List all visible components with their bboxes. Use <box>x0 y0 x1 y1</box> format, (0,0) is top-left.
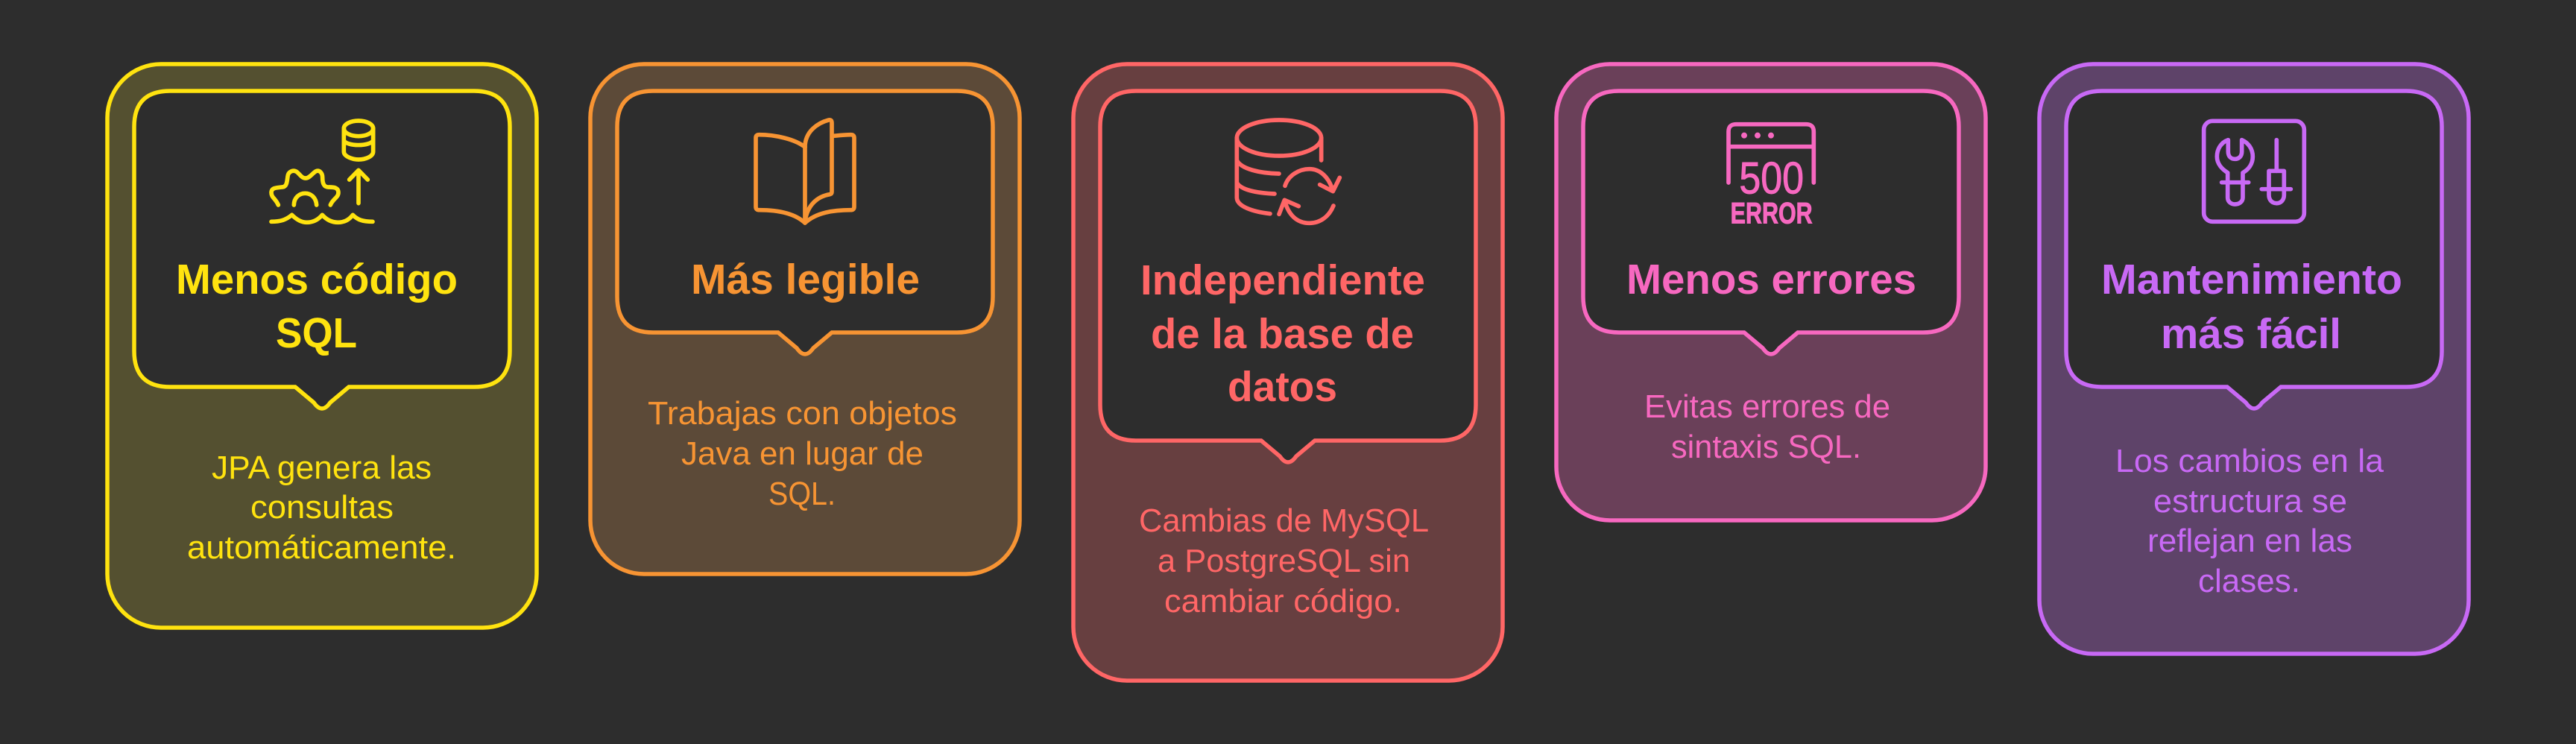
description: Cambias de MySQL <box>1139 503 1429 539</box>
description: estructura se <box>2153 484 2347 520</box>
card background <box>107 64 537 628</box>
callout box <box>1100 91 1476 462</box>
icon: 500 error window <box>1729 124 1813 230</box>
panel: Independiente de la base de datos <box>1073 64 1503 681</box>
description <box>187 450 456 566</box>
panel: Mantenimiento más fácil <box>2039 64 2469 654</box>
description <box>1139 503 1429 620</box>
callout box <box>2066 91 2442 409</box>
icon: gear and database <box>271 121 373 222</box>
icon: open book <box>756 120 854 223</box>
heading <box>2101 256 2402 358</box>
heading: Independiente <box>1140 256 1425 304</box>
description: reflejan en las <box>2147 523 2352 559</box>
heading: Mantenimiento <box>2101 256 2402 303</box>
description: JPA genera las <box>212 450 432 486</box>
panel: Menos código SQL <box>107 64 537 628</box>
heading: de la base de <box>1151 310 1414 358</box>
icon: wrench and screwdriver <box>2204 121 2304 221</box>
description: automáticamente. <box>187 530 456 566</box>
callout box <box>617 91 993 354</box>
callout box <box>134 91 510 409</box>
icon: 500 error window: ERROR <box>1731 197 1813 230</box>
description: sintaxis SQL. <box>1671 429 1861 465</box>
description: Evitas errores de <box>1644 389 1890 425</box>
description <box>648 396 957 512</box>
description: cambiar código. <box>1164 584 1402 620</box>
heading <box>1140 256 1425 411</box>
description: Java en lugar de <box>681 436 924 472</box>
description: consultas <box>250 490 394 526</box>
heading: más fácil <box>2161 310 2341 358</box>
description: Los cambios en la <box>2115 444 2384 479</box>
description: clases. <box>2198 564 2300 599</box>
panel: Menos errores <box>1556 64 1986 520</box>
description <box>1644 389 1890 465</box>
icon: 500 error window: 500 <box>1739 152 1804 203</box>
heading: Menos errores <box>1626 256 1916 303</box>
callout box <box>1583 91 1959 354</box>
heading: SQL <box>276 309 357 357</box>
description: a PostgreSQL sin <box>1158 543 1410 579</box>
heading <box>176 256 458 357</box>
icon: database sync <box>1237 120 1339 223</box>
description: SQL. <box>768 476 836 512</box>
heading: datos <box>1228 363 1337 411</box>
heading: Menos código <box>176 256 458 303</box>
card background <box>2039 64 2469 654</box>
heading: Más legible <box>691 256 920 303</box>
card background <box>1556 64 1986 520</box>
panel: Más legible <box>590 64 1020 574</box>
card background <box>590 64 1020 574</box>
card background <box>1073 64 1503 681</box>
description <box>2115 444 2384 599</box>
description: Trabajas con objetos <box>648 396 957 432</box>
